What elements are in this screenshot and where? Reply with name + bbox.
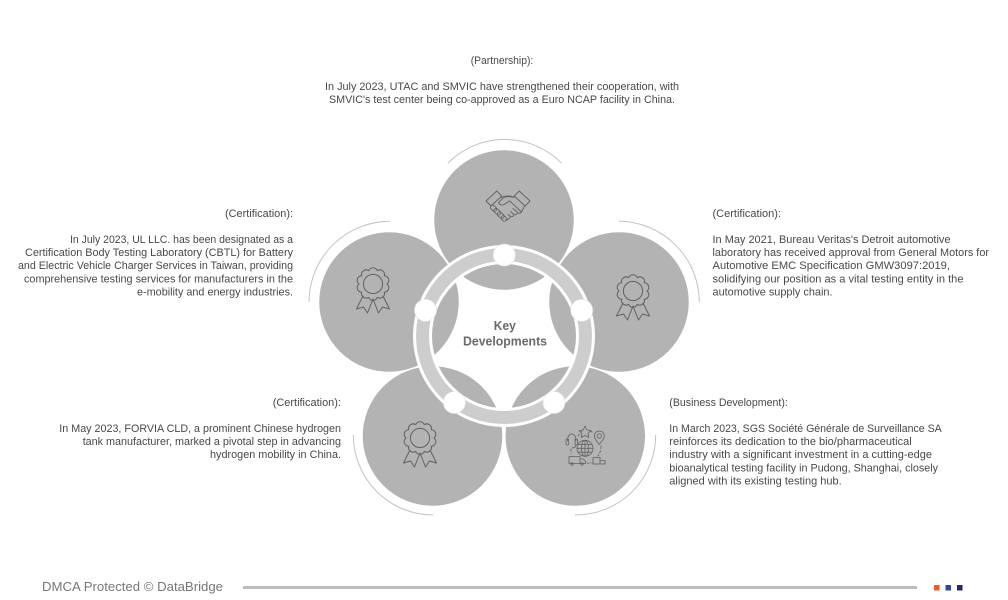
text: right certification: solidifying our position as a vital testing entity in the [712, 274, 964, 286]
icon: globe logistics [566, 426, 605, 465]
footer text: DMCA Protected © DataBridge [42, 579, 223, 594]
text: business development: aligned with its existing testing hub. [669, 476, 842, 488]
center title [463, 319, 547, 348]
text: right certification: Automotive EMC Specification GMW3097:2019, [712, 260, 950, 272]
central ring [422, 254, 586, 418]
footer rule [243, 586, 917, 589]
icon: ribbon right [616, 275, 650, 320]
ring nodes [414, 244, 593, 414]
center title: Key [494, 319, 516, 333]
text: right certification: (Certification): [712, 208, 781, 220]
text: bottom-left certification: (Certification): [273, 397, 341, 409]
circle: top [434, 150, 574, 290]
icon: handshake [486, 191, 530, 222]
text: partnership: In July 2023, UTAC and SMVIC have strengthened their cooperation, with [325, 81, 679, 93]
circle: bottom right [505, 366, 646, 506]
center title: Developments [463, 334, 547, 348]
text: left certification: e-mobility and energy industries. [137, 286, 293, 298]
text: business development: In March 2023, SGS Société Générale de Surveillance SA [669, 423, 942, 435]
text: right certification [712, 208, 989, 298]
text: right certification: In May 2021, Bureau Veritas's Detroit automotive [712, 234, 950, 246]
text: right certification: laboratory has received approval from General Motors for [712, 247, 989, 259]
text: partnership: SMVIC's test center being co-approved as a Euro NCAP facility in China. [329, 94, 675, 106]
footer squares [934, 585, 962, 590]
circle: left [318, 232, 460, 372]
text: partnership [325, 55, 679, 106]
text: bottom-left certification: In May 2023, FORVIA CLD, a prominent Chinese hydrogen [59, 423, 341, 435]
text: bottom-left certification: hydrogen mobility in China. [210, 449, 341, 461]
circle: bottom left [362, 366, 503, 506]
text: left certification: Certification Body Testing Laboratory (CBTL) for Battery [25, 247, 293, 259]
text: left certification [18, 208, 294, 298]
text: bottom-left certification: tank manufacturer, marked a pivotal step in advancing [83, 436, 341, 448]
text: business development: industry with a significant investment in a cutting-edge [669, 449, 932, 461]
text: partnership: (Partnership): [471, 55, 533, 67]
text: left certification: In July 2023, UL LLC. has been designated as a [70, 234, 294, 246]
text: business development: (Business Development): [669, 397, 788, 409]
text: business development: bioanalytical testing facility in Pudong, Shanghai, closely [669, 462, 938, 474]
circle: right [548, 232, 690, 372]
text: left certification: and Electric Vehicle Charger Services in Taiwan, providing [18, 260, 293, 272]
text: left certification: comprehensive testing services for manufacturers in the [24, 274, 293, 286]
text: business development: reinforces its dedication to the bio/pharmaceutical [669, 436, 912, 448]
icon: ribbon bottom left [404, 422, 436, 467]
text: left certification: (Certification): [225, 208, 293, 220]
outer arcs [309, 139, 699, 515]
text: bottom-left certification [59, 397, 341, 461]
text: business development [669, 397, 942, 488]
text: right certification: automotive supply chain. [712, 286, 832, 298]
icon: ribbon left [356, 268, 390, 313]
